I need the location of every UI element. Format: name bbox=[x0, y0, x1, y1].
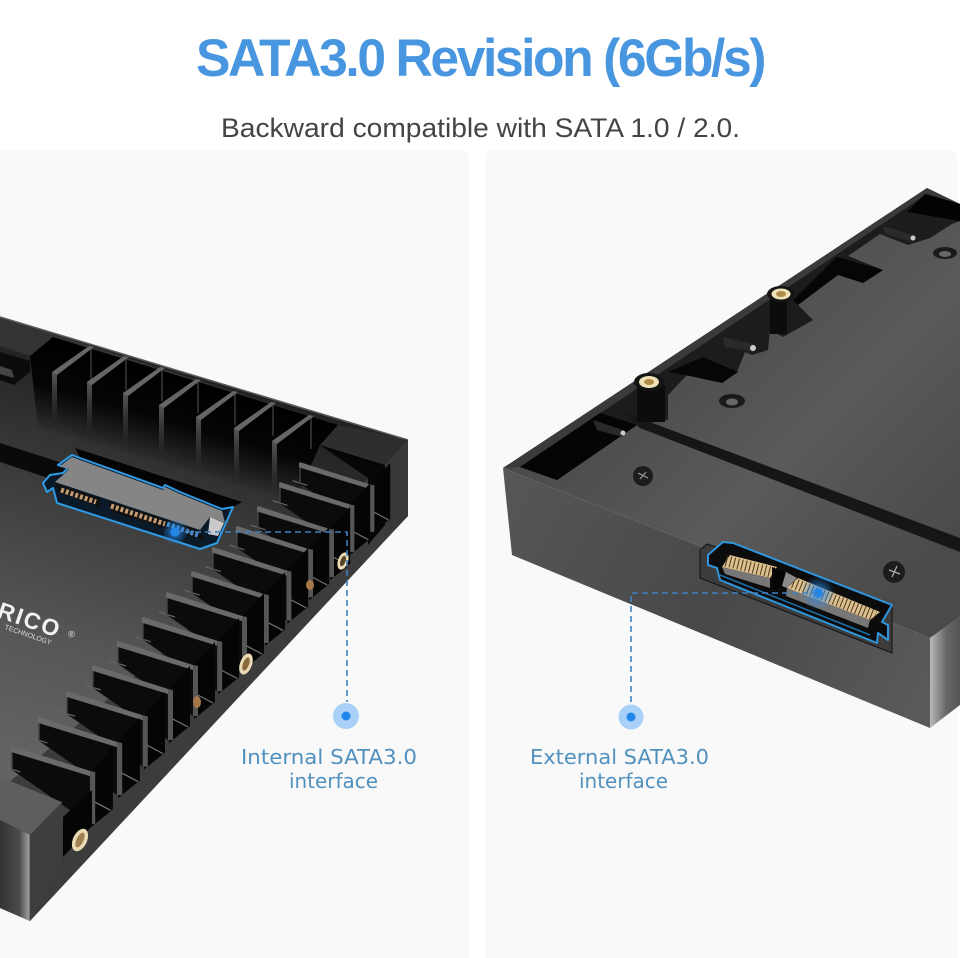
device: adapter bracket rear view bbox=[503, 188, 960, 728]
device: adapter bracket top view bbox=[0, 317, 408, 921]
icon: internal marker dot bbox=[333, 703, 359, 729]
panel: internal interface bbox=[0, 150, 469, 958]
label: external interface bbox=[530, 745, 709, 793]
label: internal interface: Internal SATA3.0 bbox=[241, 745, 417, 769]
callout: external leader line bbox=[631, 576, 835, 704]
internal SATA connector bbox=[43, 448, 242, 549]
label: internal interface bbox=[241, 745, 417, 793]
logo bbox=[0, 590, 79, 653]
title: SATA3.0 Revision (6Gb/s) bbox=[196, 29, 765, 88]
label: internal interface: interface bbox=[289, 769, 378, 793]
logo: TECHNOLOGY bbox=[4, 624, 52, 647]
brass screw holes bbox=[69, 551, 351, 854]
icon: external marker dot bbox=[618, 704, 644, 730]
right row of fins bbox=[4, 462, 390, 827]
label: external interface: interface bbox=[579, 769, 668, 793]
panel: external interface bbox=[485, 150, 960, 958]
top row of fins bbox=[52, 346, 314, 491]
callout: internal leader line bbox=[162, 519, 347, 702]
corner block bbox=[0, 777, 92, 921]
subtitle: Backward compatible with SATA 1.0 / 2.0. bbox=[221, 113, 740, 143]
logo: ® bbox=[67, 628, 77, 640]
external SATA connector bbox=[700, 542, 892, 653]
long groove bbox=[623, 412, 960, 552]
rim recess bbox=[520, 194, 960, 480]
label: external interface: External SATA3.0 bbox=[530, 745, 709, 769]
posts and screw holes bbox=[593, 226, 957, 583]
